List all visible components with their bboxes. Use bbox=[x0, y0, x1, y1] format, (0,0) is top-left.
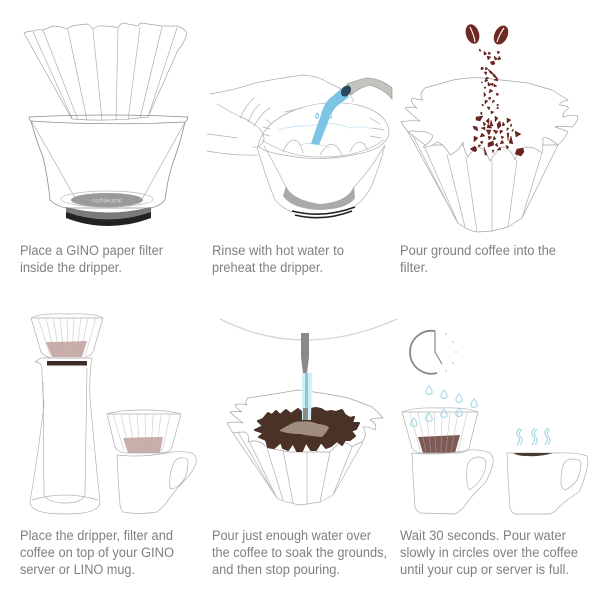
icon: dripper on mug bbox=[107, 410, 196, 514]
icon: steam bbox=[517, 428, 550, 445]
panel: step 6 wait and pour bbox=[400, 331, 588, 577]
icon: paper filter open bbox=[401, 78, 578, 232]
text: step 1 caption: Place a GINO paper filter bbox=[20, 243, 164, 258]
icon: dripper bbox=[29, 115, 188, 226]
text: step 3 caption bbox=[400, 243, 556, 275]
icon: filter with wet grounds bbox=[227, 390, 383, 505]
icon: hand holding dripper bbox=[207, 75, 353, 155]
panel: step 2 rinse bbox=[207, 75, 392, 275]
icon: water stream bbox=[278, 88, 372, 148]
icon: dripper with filter bbox=[257, 103, 389, 218]
text: step 6 caption: Wait 30 seconds. Pour water bbox=[400, 528, 567, 543]
icon: dripper on mug with dark coffee bbox=[402, 408, 493, 514]
text: step 3 caption: filter. bbox=[400, 260, 428, 275]
text: step 4 caption: server or LINO mug. bbox=[20, 562, 135, 577]
icon: full mug of coffee bbox=[507, 453, 588, 514]
text: step 5 caption: the coffee to soak the grounds, bbox=[212, 545, 387, 560]
text: step 1 caption: inside the dripper. bbox=[20, 260, 122, 275]
icon: water drops bbox=[411, 386, 477, 426]
icon: spout and water bbox=[301, 333, 312, 420]
text: step 6 caption bbox=[400, 528, 578, 577]
panel: step 5 soak the grounds bbox=[212, 319, 397, 577]
text: step 2 caption: Rinse with hot water to bbox=[212, 243, 344, 258]
icon: coffee beans bbox=[463, 22, 511, 47]
panel: step 3 ground coffee bbox=[400, 22, 578, 275]
icon: glass server bbox=[30, 358, 100, 514]
text: step 2 caption: preheat the dripper. bbox=[212, 260, 323, 275]
icon: kettle spout bbox=[339, 78, 392, 99]
text: step 3 caption: Pour ground coffee into the bbox=[400, 243, 556, 258]
text: step 4 caption: Place the dripper, filter and bbox=[20, 528, 173, 543]
text: step 5 caption bbox=[212, 528, 387, 577]
icon: 30 second timer bbox=[410, 331, 456, 374]
text: step 2 caption bbox=[212, 243, 344, 275]
icon: falling coffee grounds bbox=[470, 49, 524, 156]
panel: step 1 place filter bbox=[20, 23, 188, 275]
text: step 5 caption: and then stop pouring. bbox=[212, 562, 340, 577]
icon: paper filter bbox=[24, 23, 187, 120]
text: step 4 caption bbox=[20, 528, 174, 577]
icon: dripper: notNeutral bbox=[92, 198, 123, 204]
text: step 1 caption bbox=[20, 243, 164, 275]
text: step 6 caption: until your cup or server is full. bbox=[400, 562, 569, 577]
icon: dripper on server bbox=[31, 314, 103, 358]
text: step 4 caption: coffee on top of your GINO bbox=[20, 545, 174, 560]
icon: kettle arc bbox=[220, 319, 397, 340]
text: step 5 caption: Pour just enough water over bbox=[212, 528, 372, 543]
text: step 6 caption: slowly in circles over the coffee bbox=[400, 545, 578, 560]
panel: step 4 place on server or mug bbox=[20, 314, 196, 577]
